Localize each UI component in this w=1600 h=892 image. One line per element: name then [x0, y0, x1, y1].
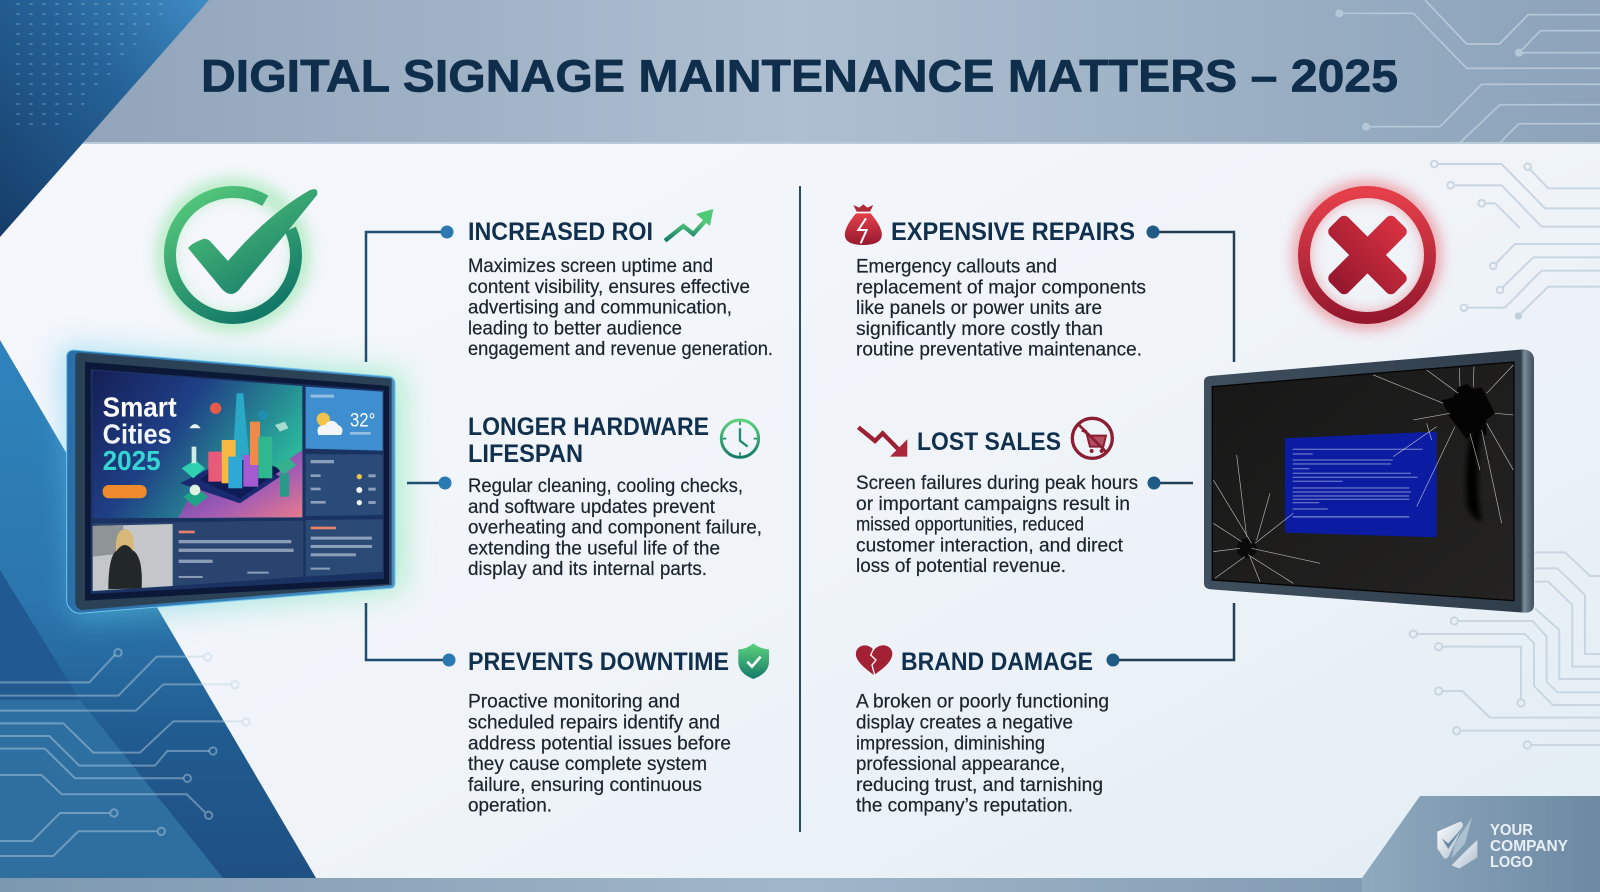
callout connector: downtime: [366, 603, 456, 666]
body text: brand damage: impression, diminishing: [856, 733, 1045, 754]
icon: broken heart: [856, 645, 892, 675]
screen: orange button: [103, 485, 147, 498]
body text: prevents downtime: failure, ensuring continuous: [468, 775, 702, 796]
logo wordmark: YOUR: [1490, 822, 1533, 839]
heading: increased ROI: INCREASED ROI: [468, 218, 653, 246]
callout connector: increased ROI: [366, 226, 454, 362]
screen: main banner: [93, 371, 302, 518]
blue error panel: [1285, 432, 1437, 537]
logo wordmark: COMPANY: [1490, 838, 1569, 855]
circuit pattern: upper right: [1431, 161, 1600, 320]
panel: brand damage: [856, 645, 1109, 817]
screen: side panel: [306, 519, 383, 577]
screen: weather panel: [306, 387, 383, 451]
body text: increased ROI: [468, 256, 773, 360]
screen: news panel: [93, 521, 303, 592]
callout connector: hardware lifespan: [407, 476, 452, 490]
damage: impact hole and cracks: [1373, 365, 1513, 523]
icon: falling arrow: [858, 427, 907, 457]
monitor glow: [60, 347, 403, 620]
body text: increased ROI: leading to better audience: [468, 318, 682, 339]
body text: brand damage: A broken or poorly functioning: [856, 692, 1109, 712]
title: DIGITAL SIGNAGE MAINTENANCE MATTERS – 2025: [201, 50, 1398, 102]
body text: increased ROI: Maximizes screen uptime and: [468, 256, 713, 277]
broken monitor: [1204, 349, 1534, 613]
body text: brand damage: the company’s reputation.: [856, 796, 1073, 817]
body text: prevents downtime: address potential issues before: [468, 733, 731, 754]
circuit pattern: lower left: [0, 649, 250, 856]
body text: longer hardware lifespan: extending the useful life of the: [468, 538, 720, 559]
logo wordmark: [1490, 822, 1569, 871]
body text: expensive repairs: replacement of major components: [856, 277, 1146, 298]
screen: headline: [103, 392, 177, 476]
body text: prevents downtime: Proactive monitoring and: [468, 692, 680, 712]
heading: longer hardware lifespan: LIFESPAN: [468, 440, 583, 468]
callout connector: expensive repairs: [1146, 226, 1234, 362]
body text: brand damage: professional appearance,: [856, 754, 1065, 775]
icon: clock: [721, 420, 759, 457]
body text: expensive repairs: significantly more costly than: [856, 319, 1103, 340]
body text: longer hardware lifespan: display and its internal parts.: [468, 559, 707, 580]
panel: increased ROI: [468, 209, 773, 360]
cracked screen: [1212, 362, 1514, 601]
body text: longer hardware lifespan: and software updates prevent: [468, 497, 716, 518]
body text: expensive repairs: like panels or power units are: [856, 298, 1102, 319]
bottom band: [0, 878, 1600, 892]
body text: expensive repairs: [856, 256, 1146, 361]
body text: expensive repairs: routine preventative maintenance.: [856, 340, 1142, 361]
body text: prevents downtime: operation.: [468, 796, 552, 817]
body text: lost sales: [856, 473, 1138, 577]
circuit pattern: header right: [1335, 0, 1600, 143]
screen: headline: Cities: [103, 418, 172, 449]
icon: red X in circle: [1301, 189, 1433, 321]
panel: longer hardware lifespan: [468, 413, 762, 580]
screen: weather panel: 32°: [350, 411, 375, 432]
damage: lower-left impact: [1213, 455, 1320, 583]
heading: prevents downtime: PREVENTS DOWNTIME: [468, 648, 729, 676]
body text: increased ROI: advertising and communication,: [468, 298, 732, 319]
center divider: [799, 186, 801, 832]
body text: longer hardware lifespan: overheating and component failure,: [468, 518, 762, 539]
icon: shield: [738, 643, 769, 679]
heading: longer hardware lifespan: LONGER HARDWARE: [468, 413, 709, 441]
working monitor: [60, 347, 403, 620]
body text: increased ROI: engagement and revenue generation.: [468, 339, 773, 360]
callout connector: brand damage: [1106, 603, 1234, 666]
top-left blue triangle: [0, 0, 209, 237]
heading: expensive repairs: EXPENSIVE REPAIRS: [891, 218, 1135, 246]
callout connector: lost sales: [1148, 476, 1193, 490]
heading: lost sales: LOST SALES: [917, 428, 1061, 456]
body text: lost sales: missed opportunities, reduced: [856, 515, 1084, 536]
panel: prevents downtime: [468, 643, 769, 817]
lower-left blue geometric shape: [0, 340, 316, 878]
heading: brand damage: BRAND DAMAGE: [901, 648, 1093, 676]
screen: headline: Smart: [103, 392, 177, 423]
icon: green check in circle: [165, 187, 317, 323]
logo wordmark: LOGO: [1490, 854, 1533, 871]
screen: forecast list: [306, 454, 383, 516]
body text: brand damage: display creates a negative: [856, 712, 1073, 734]
logo panel: [1362, 796, 1600, 892]
body text: prevents downtime: scheduled repairs identify and: [468, 712, 720, 734]
header band: [0, 0, 1600, 144]
body text: lost sales: customer interaction, and direct: [856, 535, 1124, 556]
panel: expensive repairs: [845, 204, 1146, 361]
circuit pattern: lower right: [1410, 552, 1600, 749]
icon: logo mark: [1437, 817, 1477, 869]
icon: money bag: [845, 204, 882, 245]
body text: prevents downtime: they cause complete system: [468, 754, 707, 775]
screen: isometric city: [180, 393, 297, 507]
monitor frame: [67, 350, 395, 613]
panel: lost sales: [856, 418, 1138, 577]
body text: increased ROI: content visibility, ensures effective: [468, 277, 750, 298]
body text: brand damage: [856, 692, 1109, 817]
body text: longer hardware lifespan: [468, 476, 762, 580]
body text: lost sales: loss of potential revenue.: [856, 556, 1066, 577]
screen: headline: 2025: [103, 445, 161, 476]
heading: longer hardware lifespan: [468, 413, 709, 468]
body text: prevents downtime: [468, 692, 731, 817]
body text: expensive repairs: Emergency callouts and: [856, 256, 1057, 278]
icon: rising arrow: [665, 209, 713, 241]
monitor frame: [1204, 349, 1534, 613]
body text: lost sales: or important campaigns result in: [856, 494, 1130, 515]
body text: lost sales: Screen failures during peak hours: [856, 473, 1138, 494]
body text: brand damage: reducing trust, and tarnishing: [856, 775, 1103, 796]
icon: no shopping cart: [1072, 418, 1112, 458]
body text: longer hardware lifespan: Regular cleaning, cooling checks,: [468, 476, 743, 497]
